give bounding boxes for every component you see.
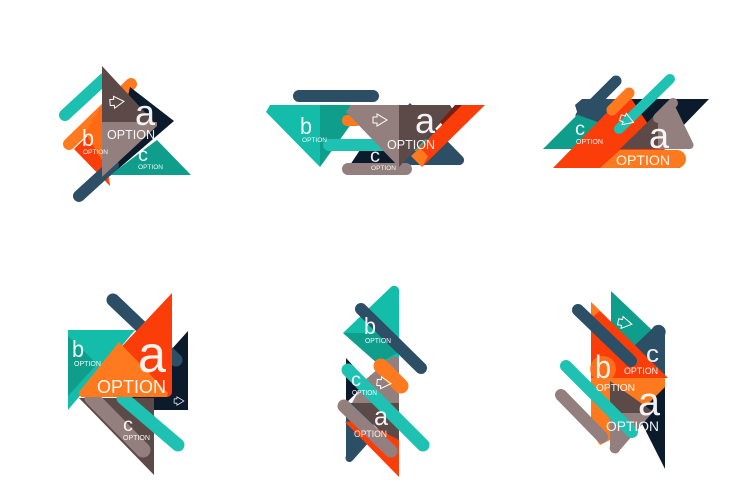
icon: arrow — [618, 112, 636, 128]
orange band end — [411, 148, 428, 167]
letter b: b — [595, 349, 611, 385]
green triangle — [611, 291, 652, 345]
red triangle — [345, 420, 399, 477]
orange base — [600, 150, 686, 168]
gray triangle bottom — [102, 122, 157, 177]
green triangle — [320, 105, 365, 167]
brown triangle — [352, 403, 399, 450]
gray triangle — [352, 356, 399, 403]
letter a: a — [649, 115, 670, 156]
letter c: c — [138, 145, 148, 166]
label option b: OPTION — [596, 383, 635, 394]
navy bar — [293, 90, 379, 102]
navy bar — [79, 165, 113, 196]
green triangle — [343, 333, 399, 364]
green triangle — [110, 140, 191, 175]
brown triangle — [79, 398, 154, 475]
label option: OPTION — [97, 377, 166, 397]
orange bar — [612, 93, 629, 110]
teal bar — [123, 398, 178, 445]
panel: banner group 3 — [543, 79, 709, 168]
panel: banner group 5 — [343, 286, 423, 477]
orange circle — [590, 356, 616, 382]
label option b: OPTION — [302, 137, 327, 144]
teal shape — [68, 330, 135, 410]
brown triangle — [610, 381, 655, 413]
gray triangle — [346, 105, 399, 167]
label option: OPTION — [387, 137, 435, 152]
teal bar — [566, 366, 632, 432]
label option: OPTION — [354, 429, 387, 439]
orange area — [79, 342, 168, 397]
letter b: b — [72, 336, 84, 362]
navy triangle — [110, 87, 174, 176]
navy bar — [113, 300, 176, 360]
red triangle — [553, 92, 686, 168]
orange triangle — [85, 105, 110, 186]
letter a: a — [374, 401, 389, 431]
letter c: c — [575, 119, 585, 140]
brown triangle top — [102, 66, 154, 122]
gray bar — [344, 406, 391, 451]
navy triangle — [345, 403, 378, 462]
orange tip — [591, 302, 600, 318]
label option b: OPTION — [365, 338, 391, 345]
navy bar — [361, 309, 421, 368]
teal bar — [348, 370, 423, 445]
orange bar — [381, 366, 401, 386]
navy band — [575, 99, 650, 130]
panel: banner group 6 — [561, 291, 668, 469]
letter c: c — [370, 146, 380, 167]
gray triangle — [658, 100, 694, 149]
panel: banner group 4 — [68, 293, 188, 475]
red triangle — [591, 302, 668, 378]
red triangle — [74, 122, 110, 186]
letter a: a — [138, 326, 166, 384]
green triangle — [543, 100, 612, 149]
orange bar — [69, 84, 131, 144]
label option b: OPTION — [83, 149, 108, 156]
label option c: OPTION — [371, 165, 396, 172]
letter a: a — [638, 380, 661, 424]
navy triangle — [350, 103, 464, 165]
navy shape — [633, 325, 666, 462]
red and orange band — [411, 105, 485, 167]
teal bar — [65, 79, 104, 115]
brown triangle — [620, 112, 658, 149]
letter b: b — [82, 125, 94, 151]
gray bar — [342, 163, 412, 175]
letter b: b — [364, 313, 376, 339]
label option c: OPTION — [576, 139, 603, 146]
letter a: a — [135, 92, 156, 133]
label option b: OPTION — [74, 361, 101, 368]
black triangle — [117, 331, 188, 410]
icon: arrow — [174, 397, 184, 405]
letter a: a — [415, 100, 436, 141]
dark red wedge — [440, 105, 468, 128]
teal bar — [323, 139, 430, 151]
brown triangle — [399, 105, 453, 167]
icon: arrow — [110, 95, 124, 109]
label option: OPTION — [616, 152, 670, 168]
teal triangle — [343, 286, 399, 382]
letter c: c — [351, 370, 361, 391]
gray bar — [92, 398, 143, 450]
panel: banner group 1 — [65, 66, 191, 196]
teal triangle — [266, 105, 320, 167]
orange band — [591, 378, 665, 445]
gray bar — [561, 395, 602, 437]
navy bar — [581, 81, 616, 116]
label option c: OPTION — [123, 435, 150, 442]
panel: banner group 2 — [266, 90, 485, 175]
label option c: OPTION — [352, 390, 377, 397]
label option: OPTION — [107, 128, 155, 142]
letter c: c — [123, 415, 133, 436]
black triangle — [350, 150, 400, 165]
orange shape — [342, 115, 362, 126]
icon: arrow — [377, 376, 391, 390]
gray shape — [610, 413, 652, 453]
letter b: b — [300, 113, 312, 139]
gray bar — [658, 103, 673, 118]
icon: arrow — [617, 316, 633, 330]
icon: arrow — [373, 114, 387, 126]
red triangle — [79, 293, 172, 397]
label option c: OPTION — [138, 164, 163, 171]
black triangle — [346, 358, 368, 403]
teal bar — [619, 79, 670, 129]
label option c: OPTION — [624, 366, 658, 376]
black band — [612, 99, 709, 160]
label option: OPTION — [606, 418, 659, 434]
green triangle — [68, 336, 97, 396]
navy bar — [578, 310, 631, 361]
letter c: c — [646, 341, 659, 368]
black triangle — [620, 380, 665, 469]
